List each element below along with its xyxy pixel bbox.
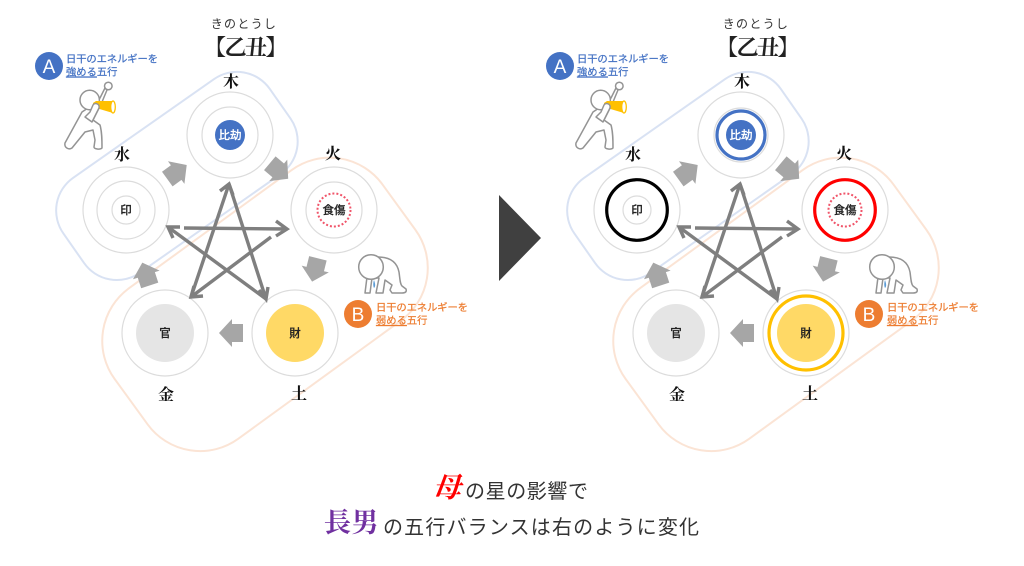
element labels: 木	[223, 73, 239, 91]
caption line 2	[324, 508, 699, 539]
badge A: A	[43, 57, 56, 78]
arrows: star	[679, 184, 798, 299]
element labels: 金	[158, 385, 174, 404]
node: metal	[122, 290, 208, 376]
note B	[887, 302, 979, 327]
element labels: 水	[114, 146, 130, 164]
icon: crawling figure	[870, 255, 917, 293]
element labels: 木	[734, 73, 750, 91]
icon: crawling figure	[359, 255, 406, 293]
caption line 2: 長男	[324, 508, 379, 538]
note B: 弱める五行	[376, 314, 427, 327]
note B: 日干のエネルギーを	[887, 302, 979, 314]
node: fire: 食傷	[322, 203, 346, 217]
arrows: cycle	[129, 153, 331, 347]
node: metal	[633, 290, 719, 376]
element labels: 水	[625, 146, 641, 164]
node: wood: 比劫	[218, 129, 242, 142]
element labels: 火	[836, 146, 852, 163]
node: earth	[252, 290, 338, 376]
node: earth: 財	[289, 326, 301, 340]
node: metal: 官	[159, 326, 171, 340]
caption line 1: 母	[433, 473, 464, 504]
title: 【乙丑】	[716, 35, 798, 60]
arrows: star	[168, 184, 287, 299]
element labels: 土	[802, 384, 818, 403]
node: water, black ring	[594, 167, 680, 253]
element labels	[114, 73, 341, 404]
node: wood, blue ring: 比劫	[730, 129, 752, 142]
element labels: 火	[325, 146, 341, 163]
node: metal: 官	[670, 326, 682, 340]
node: water	[83, 167, 169, 253]
element labels	[625, 73, 852, 404]
node: fire, red ring	[802, 167, 888, 253]
badge A: A	[554, 57, 567, 78]
icon: figure with megaphone	[576, 82, 626, 149]
node: fire, red ring: 食傷	[834, 203, 857, 217]
region A outline	[40, 56, 313, 296]
note A: 日干のエネルギーを	[66, 54, 158, 66]
node: water, black ring: 印	[631, 204, 643, 217]
title: 【乙丑】	[204, 35, 286, 60]
note A	[577, 54, 669, 78]
badge B	[855, 300, 883, 328]
node: earth, gold ring: 財	[800, 326, 812, 340]
caption line 1	[433, 473, 588, 504]
caption line 1: の星の影響で	[465, 480, 588, 503]
region A outline	[551, 56, 824, 296]
badge A	[35, 52, 63, 80]
note B: 弱める五行	[887, 314, 938, 327]
note A: 強める五行	[577, 66, 628, 78]
badge B: B	[352, 305, 364, 326]
node: earth, gold ring	[763, 290, 849, 376]
node: wood	[187, 92, 273, 178]
caption line 2: の五行バランスは右のように変化	[383, 516, 699, 539]
element labels: 金	[669, 385, 685, 404]
node: water: 印	[120, 204, 132, 217]
furigana: きのとうし	[723, 17, 789, 31]
furigana: きのとうし	[211, 17, 277, 31]
region B outline	[76, 132, 454, 477]
note A: 強める五行	[66, 66, 117, 78]
icon: figure with megaphone	[65, 82, 115, 149]
panel: right five-element diagram	[546, 17, 979, 477]
note A	[66, 54, 158, 78]
arrows: cycle	[640, 153, 842, 347]
badge A	[546, 52, 574, 80]
node: fire	[291, 167, 377, 253]
badge B	[344, 300, 372, 328]
node: wood, blue ring	[698, 92, 784, 178]
note A: 日干のエネルギーを	[577, 54, 669, 66]
panel: left five-element diagram	[35, 17, 468, 477]
note B	[376, 302, 468, 327]
arrow: big transition triangle	[499, 195, 541, 281]
region B outline	[587, 132, 965, 477]
note B: 日干のエネルギーを	[376, 302, 468, 314]
element labels: 土	[291, 384, 307, 403]
badge B: B	[863, 305, 875, 326]
